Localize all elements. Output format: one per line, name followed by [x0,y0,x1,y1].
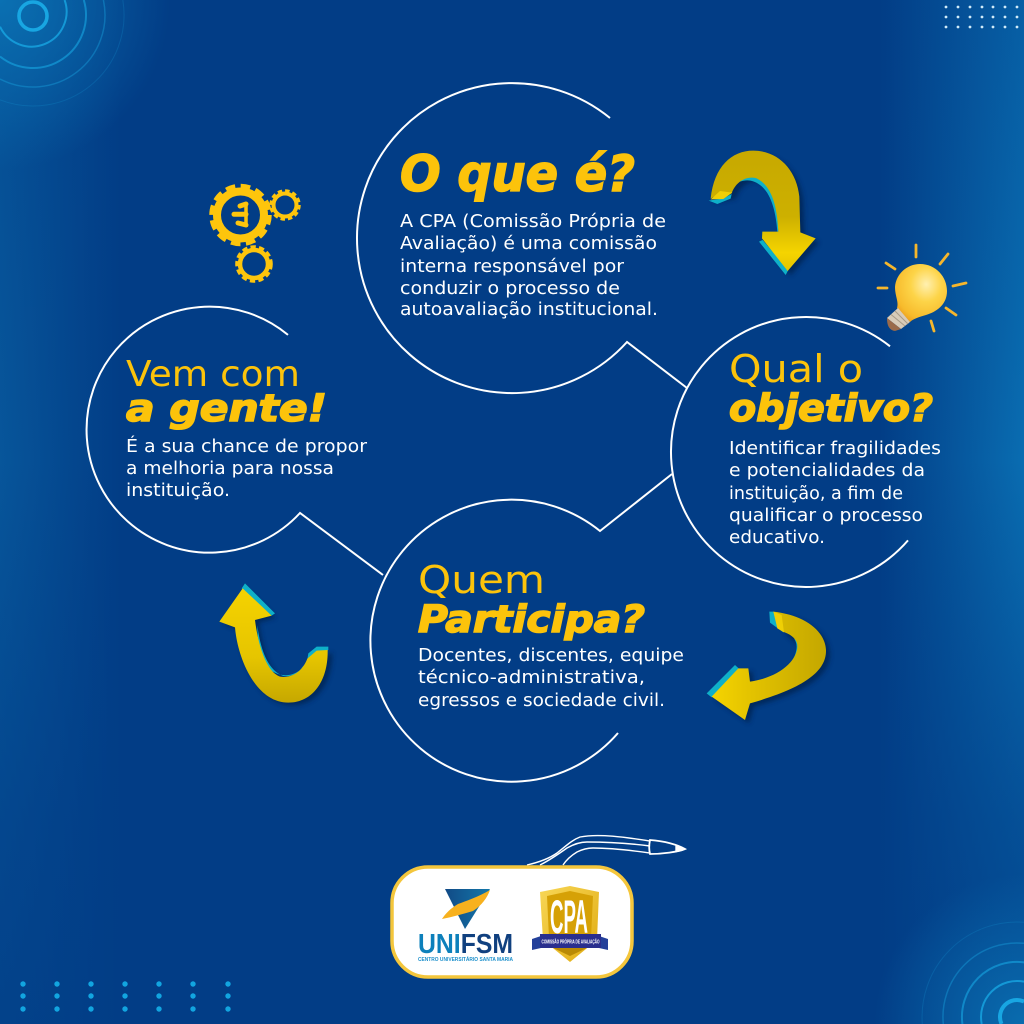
dot grid: bottom left [20,981,231,1012]
text: invitation description: a melhoria para nossa [126,459,334,479]
heading: Participa?: Participa? [418,598,645,641]
outline: O que é? bubble [357,83,687,393]
text: O que é? description: interna responsável por [400,257,625,277]
outline: Vem com a gente! bubble [87,307,383,575]
panel: Quem Participa? [370,474,684,782]
outline: Quem Participa? bubble [370,474,672,782]
icon: light bulb [878,245,966,331]
text: participants description: técnico-administrativa, [418,668,645,688]
arrow: top, curving down right [709,151,819,276]
text: participants description: egressos e sociedade civil. [418,691,665,711]
logo: UNIFSM: UNIFSM [418,928,513,959]
text: O que é? description [400,212,666,320]
logo: UNIFSM: CENTRO UNIVERSITÁRIO SANTA MARIA [418,956,513,963]
text: invitation description: É a sua chance de propor [126,435,368,457]
text: O que é? description: Avaliação) é uma comissão [400,234,657,254]
heading: a gente!: a gente! [126,387,327,430]
logo: CPA shield [532,886,608,962]
arrow: left, curving up [219,583,332,705]
logo card [392,867,632,977]
panel: Vem com a gente! [87,307,383,575]
logo: UNIFSM [418,889,513,963]
text: participants description [418,646,684,711]
bulb glass [895,264,947,322]
text: O que é? description: autoavaliação institucional. [400,300,658,320]
bulb base [887,308,910,331]
dot grid: top right [945,6,1018,28]
icon: pencil flourish [527,836,685,865]
text: invitation description: instituição. [126,481,230,501]
panel: O que é? [357,83,687,393]
outline: Qual o objetivo? bubble [671,317,908,587]
logo: CPA shield: CPA [550,890,588,943]
text: O que é? description: conduzir o processo de [400,279,620,299]
text: objective description: instituição, a fim de [729,484,903,504]
text: objective description [729,439,941,548]
bulb rays [878,245,966,331]
text: participants description: Docentes, discentes, equipe [418,646,684,666]
panel: Qual o objetivo? [671,317,941,587]
text: objective description: qualificar o processo [729,506,923,526]
heading: objetivo?: objetivo? [729,387,933,430]
text: invitation description [126,435,368,501]
heading: Quem: Quem [418,558,545,602]
text: objective description: e potencialidades da [729,461,925,481]
concentric rings: top left [0,0,124,106]
heading: O que é?: O que é? [400,145,635,203]
logo: CPA shield: COMISSÃO PRÓPRIA DE AVALIAÇÃO [542,938,600,946]
heading: Qual o: Qual o [729,347,863,391]
text: O que é? description: A CPA (Comissão Própria de [400,212,666,232]
arrow: right, curving down left [707,612,830,723]
heading: Vem com: Vem com [126,354,300,395]
concentric rings: bottom right [922,922,1024,1024]
text: objective description: educativo. [729,528,825,548]
icon: gears [212,186,299,281]
text: objective description: Identificar fragilidades [729,439,941,459]
